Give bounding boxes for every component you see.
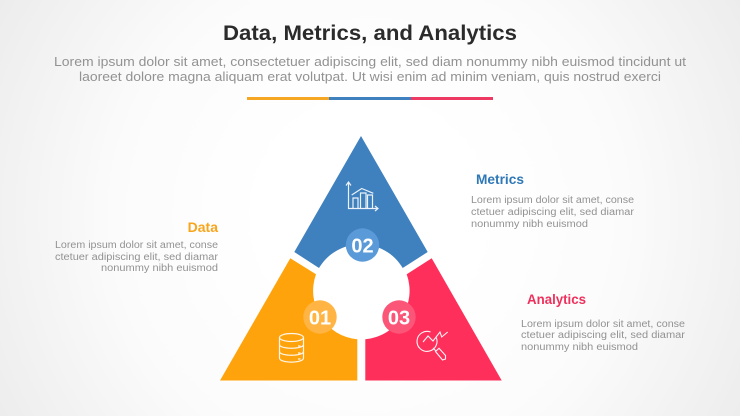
panel: data segment bbox=[220, 258, 357, 380]
badge 02: 02 bbox=[351, 235, 374, 257]
badge 01 bbox=[303, 300, 337, 334]
intro paragraph bbox=[54, 54, 686, 84]
text block: metrics: nonummy nibh euismod bbox=[471, 219, 588, 230]
text block: data bbox=[55, 219, 219, 274]
icon: database bbox=[280, 334, 304, 362]
text block: analytics: Lorem ipsum dolor sit amet, conse bbox=[521, 319, 685, 330]
intro paragraph: laoreet dolore magna aliquam erat volutpat. Ut wisi enim ad minim veniam, quis nostrud exerci bbox=[79, 69, 661, 84]
badge 03 bbox=[382, 300, 416, 334]
text block: data: nonummy nibh euismod bbox=[101, 263, 218, 274]
title: Data, Metrics, and Analytics bbox=[223, 21, 517, 45]
badge 01: 01 bbox=[309, 307, 331, 329]
text block: analytics: ctetuer adipiscing elit, sed diamar bbox=[521, 330, 686, 341]
text block: data: Data bbox=[188, 219, 218, 235]
badge 02 bbox=[346, 228, 379, 262]
text block: metrics bbox=[471, 171, 635, 230]
text block: analytics bbox=[521, 291, 686, 353]
intro paragraph: Lorem ipsum dolor sit amet, consectetuer adipiscing elit, sed diam nonummy nibh euismod tincidunt ut bbox=[54, 54, 686, 69]
icon: magnifier with trend line bbox=[417, 331, 448, 360]
tricolor divider bbox=[247, 97, 493, 100]
text block: metrics: ctetuer adipiscing elit, sed diamar bbox=[471, 207, 635, 218]
panel: analytics segment bbox=[365, 258, 502, 380]
icon: bar chart bbox=[346, 182, 378, 211]
text block: data: Lorem ipsum dolor sit amet, conse bbox=[55, 240, 218, 251]
text block: analytics: Analytics bbox=[527, 291, 586, 307]
text block: metrics: Lorem ipsum dolor sit amet, conse bbox=[471, 195, 634, 206]
panel: metrics segment bbox=[294, 136, 428, 268]
text block: data: ctetuer adipiscing elit, sed diamar bbox=[55, 252, 219, 263]
badge 03: 03 bbox=[388, 307, 410, 329]
text block: metrics: Metrics bbox=[476, 171, 524, 187]
text block: analytics: nonummy nibh euismod bbox=[521, 342, 638, 353]
